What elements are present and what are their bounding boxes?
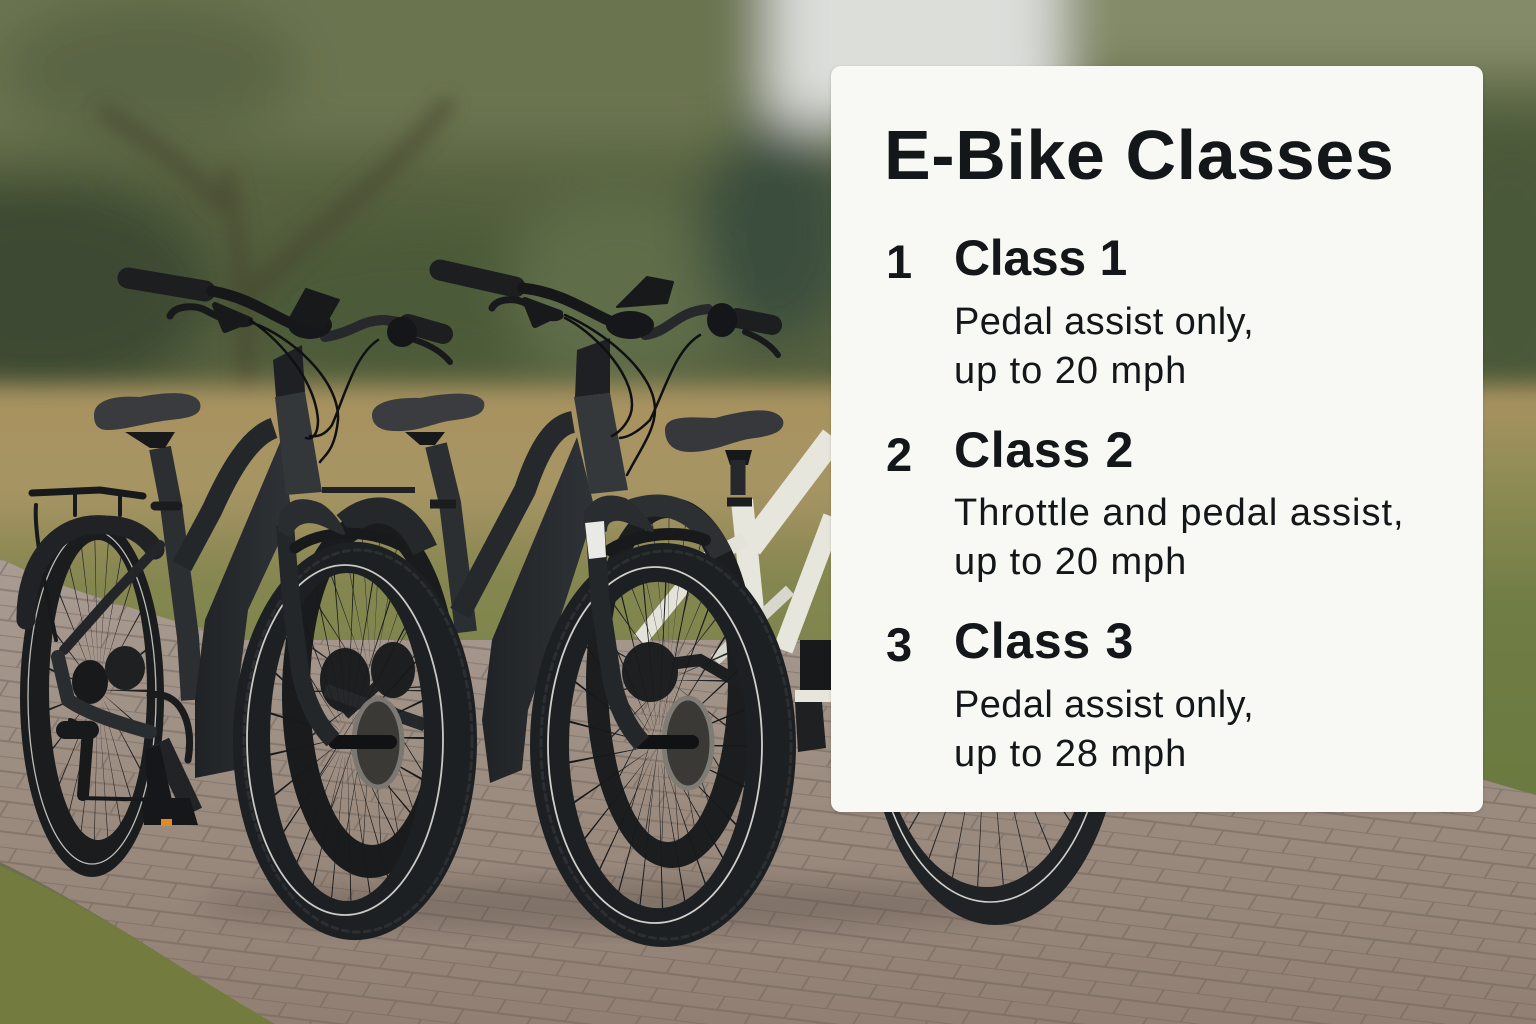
crank, chain ring and pedal [142, 694, 198, 826]
front fender [610, 534, 705, 550]
seat tube [160, 448, 192, 700]
background: blurred trees and sky [0, 0, 1536, 440]
saddle and seat tube [345, 394, 484, 715]
black bike one [20, 278, 477, 940]
brake disc and hub [335, 699, 402, 787]
class 2 description: up to 20 mph [954, 541, 1187, 583]
front wheel [233, 542, 477, 940]
tree trunk [100, 100, 450, 440]
ground shadows [200, 881, 1040, 929]
reflective fork band [585, 521, 606, 559]
fork [285, 525, 333, 740]
cassette and chain [65, 646, 170, 800]
white bike [640, 410, 1123, 925]
top tube [460, 422, 573, 613]
fork crown [585, 498, 652, 530]
front fender [295, 533, 400, 548]
class 3 name: Class 3 [954, 613, 1134, 669]
brake disc and hub [640, 698, 712, 788]
grass corner [0, 866, 275, 1024]
handlebars [440, 270, 778, 355]
front wheel [530, 543, 796, 947]
class 3 description: Pedal assist only, [954, 684, 1254, 726]
class 3 description [954, 684, 1254, 775]
class 1 description: up to 20 mph [954, 350, 1187, 392]
panel: e-bike classes card [831, 66, 1483, 812]
rear wheel [20, 517, 164, 877]
second bike rear wheel and fender [586, 498, 758, 868]
head tube [275, 392, 322, 495]
white bike frame [640, 437, 835, 752]
class 1 number: 1 [886, 235, 912, 288]
class 1 name: Class 1 [954, 230, 1127, 286]
chain stay [58, 657, 150, 732]
rear rack and fender [26, 490, 155, 640]
class 2 number: 2 [886, 428, 912, 481]
display [617, 277, 673, 307]
handlebars [128, 278, 450, 362]
class 1 description [954, 301, 1254, 392]
down tube and motor [482, 437, 595, 783]
display [290, 289, 339, 330]
stem [273, 345, 305, 397]
head tube [574, 393, 628, 494]
class 2 description: Throttle and pedal assist, [954, 492, 1405, 534]
saddle [94, 393, 200, 448]
seat stay [64, 545, 160, 650]
background bike behind the first bike [282, 394, 484, 878]
cables [565, 315, 700, 475]
white bike wheel [867, 475, 1123, 925]
fork crown [280, 501, 343, 535]
rear wheel [282, 512, 458, 878]
background: wheat field and grass [0, 385, 1536, 810]
heading: E-Bike Classes [884, 116, 1394, 194]
class 2 description [954, 492, 1405, 583]
drivetrain [320, 642, 425, 725]
brick path [0, 558, 1536, 1024]
class 3 number: 3 [886, 618, 912, 671]
class 1 description: Pedal assist only, [954, 301, 1254, 343]
class 2 name: Class 2 [954, 422, 1134, 478]
seat clamp [155, 502, 178, 510]
top tube [182, 428, 274, 566]
cables [250, 320, 378, 462]
down tube and motor [195, 440, 292, 778]
rack and fender [322, 490, 425, 550]
stem [575, 338, 610, 397]
white bike saddle [665, 410, 783, 502]
class 3 description: up to 28 mph [954, 733, 1187, 775]
fork [594, 510, 642, 743]
black bike two [440, 270, 796, 947]
